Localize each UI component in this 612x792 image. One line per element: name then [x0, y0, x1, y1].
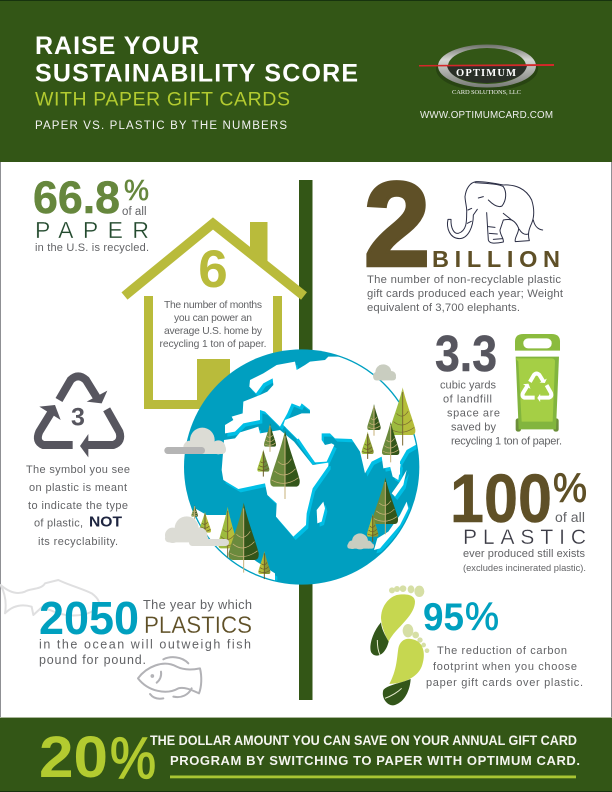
- house text: [160, 300, 266, 350]
- house text: average U.S. home by: [164, 326, 263, 337]
- icon: leaf footprints: [370, 585, 429, 705]
- stat: 2050 plastics: [39, 592, 252, 667]
- logo: OPTIMUM: [456, 68, 516, 79]
- title: SUSTAINABILITY SCORE: [35, 60, 358, 88]
- continents: [196, 356, 416, 581]
- stat: 95%: %: [465, 596, 499, 639]
- title: [35, 32, 358, 110]
- house text: recycling 1 ton of paper.: [160, 339, 266, 350]
- stat: 66.8% paper: 66.8: [33, 172, 120, 223]
- stat: 3.3 cubic yards: space are: [447, 408, 500, 420]
- stat: 100% plastic: ever produced still exists: [463, 548, 586, 560]
- stat: 3.3 cubic yards: cubic yards: [440, 380, 496, 392]
- subtitle: PAPER VS. PLASTIC BY THE NUMBERS: [35, 120, 287, 132]
- stat: 2050 plastics: 2050: [39, 592, 139, 644]
- house: 6 months: 6: [198, 240, 228, 299]
- trees: lower left: [191, 505, 270, 579]
- stat: 2 billion: BILLION: [432, 246, 560, 272]
- stat: 95%: 95: [423, 596, 464, 639]
- trees: asia: [362, 387, 415, 542]
- cloud: lower left: [165, 516, 229, 546]
- stat: 100% plastic: of all: [555, 509, 585, 525]
- icon: elephant: [447, 182, 543, 243]
- house text: you can power an: [174, 313, 252, 324]
- footer stat 20%: 20: [39, 725, 108, 790]
- stat: 2 billion: gift cards produced each year; Weight: [367, 288, 564, 300]
- stat: 100% plastic: PLASTIC: [463, 526, 586, 549]
- footer text: PROGRAM BY SWITCHING TO PAPER WITH OPTIMUM CARD.: [170, 753, 580, 768]
- stat: 66.8% paper: of all: [122, 206, 146, 218]
- stat: 3.3 cubic yards: of landfill: [443, 394, 492, 406]
- recycling symbol text: its recyclability.: [38, 536, 118, 548]
- stat: 66.8% paper: PAPER: [35, 217, 149, 243]
- recycling symbol 3: 3: [71, 404, 85, 432]
- central vertical bar: [299, 180, 312, 700]
- recycling symbol text: NOT: [89, 514, 122, 530]
- stat: 100% plastic: [450, 460, 587, 573]
- stat: 3.3 cubic yards: 3.3: [435, 325, 497, 382]
- house text: The number of months: [164, 300, 262, 311]
- footer band: [0, 717, 612, 792]
- footer stat 20%: %: [110, 726, 156, 791]
- title: RAISE YOUR: [35, 32, 199, 60]
- stat: 2 billion: equivalent of 3,700 elephants.: [367, 302, 520, 314]
- recycling symbol text: of plastic,: [34, 518, 83, 530]
- website: WWW.OPTIMUMCARD.COM: [420, 110, 553, 121]
- stat: 100% plastic: 100: [450, 460, 552, 537]
- stat: 3.3 cubic yards: recycling 1 ton of paper.: [451, 436, 562, 448]
- logo: [419, 44, 554, 96]
- recycle glyph: [522, 374, 551, 402]
- stat: 2 billion: The number of non-recyclable plastic: [367, 274, 561, 286]
- stat: 66.8% paper: [33, 172, 149, 254]
- trees: africa: [257, 423, 300, 499]
- cloud: left with grey bar: [164, 428, 226, 454]
- globe with trees and clouds: [164, 349, 436, 585]
- recycling symbol text: The symbol you see: [26, 464, 130, 476]
- stat: 2 billion: [364, 158, 564, 314]
- recycling symbol text: to indicate the type: [28, 500, 128, 512]
- footer stat 20%: [39, 725, 156, 791]
- stat: 95%: [423, 596, 583, 689]
- stat: 3.3 cubic yards: [435, 325, 562, 448]
- stat: 2050 plastics: PLASTICS: [144, 612, 252, 639]
- stat: 100% plastic: %: [553, 465, 587, 511]
- stat: 100% plastic: (excludes incinerated plastic).: [463, 563, 586, 573]
- stat: 66.8% paper: in the U.S. is recycled.: [35, 242, 149, 254]
- logo: CARD SOLUTIONS, LLC: [452, 89, 521, 96]
- stat: 2 billion: 2: [364, 158, 430, 292]
- stat: 2050 plastics: pound for pound.: [39, 653, 146, 667]
- stat: 95%: footprint when you choose: [433, 661, 577, 673]
- header band: [0, 0, 612, 162]
- house: 6 months: [124, 222, 304, 409]
- footer text: [150, 732, 580, 768]
- recycling symbol text: [26, 464, 130, 548]
- footer text: THE DOLLAR AMOUNT YOU CAN SAVE ON YOUR ANNUAL GIFT CARD: [150, 732, 577, 748]
- icon: outlined fish bottom: [138, 657, 201, 699]
- cloud: lower right: [347, 533, 374, 549]
- icon: outlined fish top left: [1, 580, 99, 615]
- stat: 66.8% paper: %: [124, 175, 149, 207]
- stat: 3.3 cubic yards: saved by: [451, 422, 496, 434]
- stat: 2050 plastics: in the ocean will outweigh fish: [39, 638, 251, 652]
- recycling symbol text: on plastic is meant: [29, 482, 127, 494]
- stat: 95%: The reduction of carbon: [437, 645, 567, 657]
- title: WITH PAPER GIFT CARDS: [35, 88, 290, 110]
- stat: 95%: paper gift cards over plastic.: [426, 677, 583, 689]
- stat: 2050 plastics: The year by which: [143, 597, 252, 612]
- icon: recycling bin: [515, 334, 560, 432]
- large tree lower left: [229, 503, 259, 573]
- cloud: upper right: [373, 364, 396, 380]
- recycling symbol 3: [38, 376, 120, 457]
